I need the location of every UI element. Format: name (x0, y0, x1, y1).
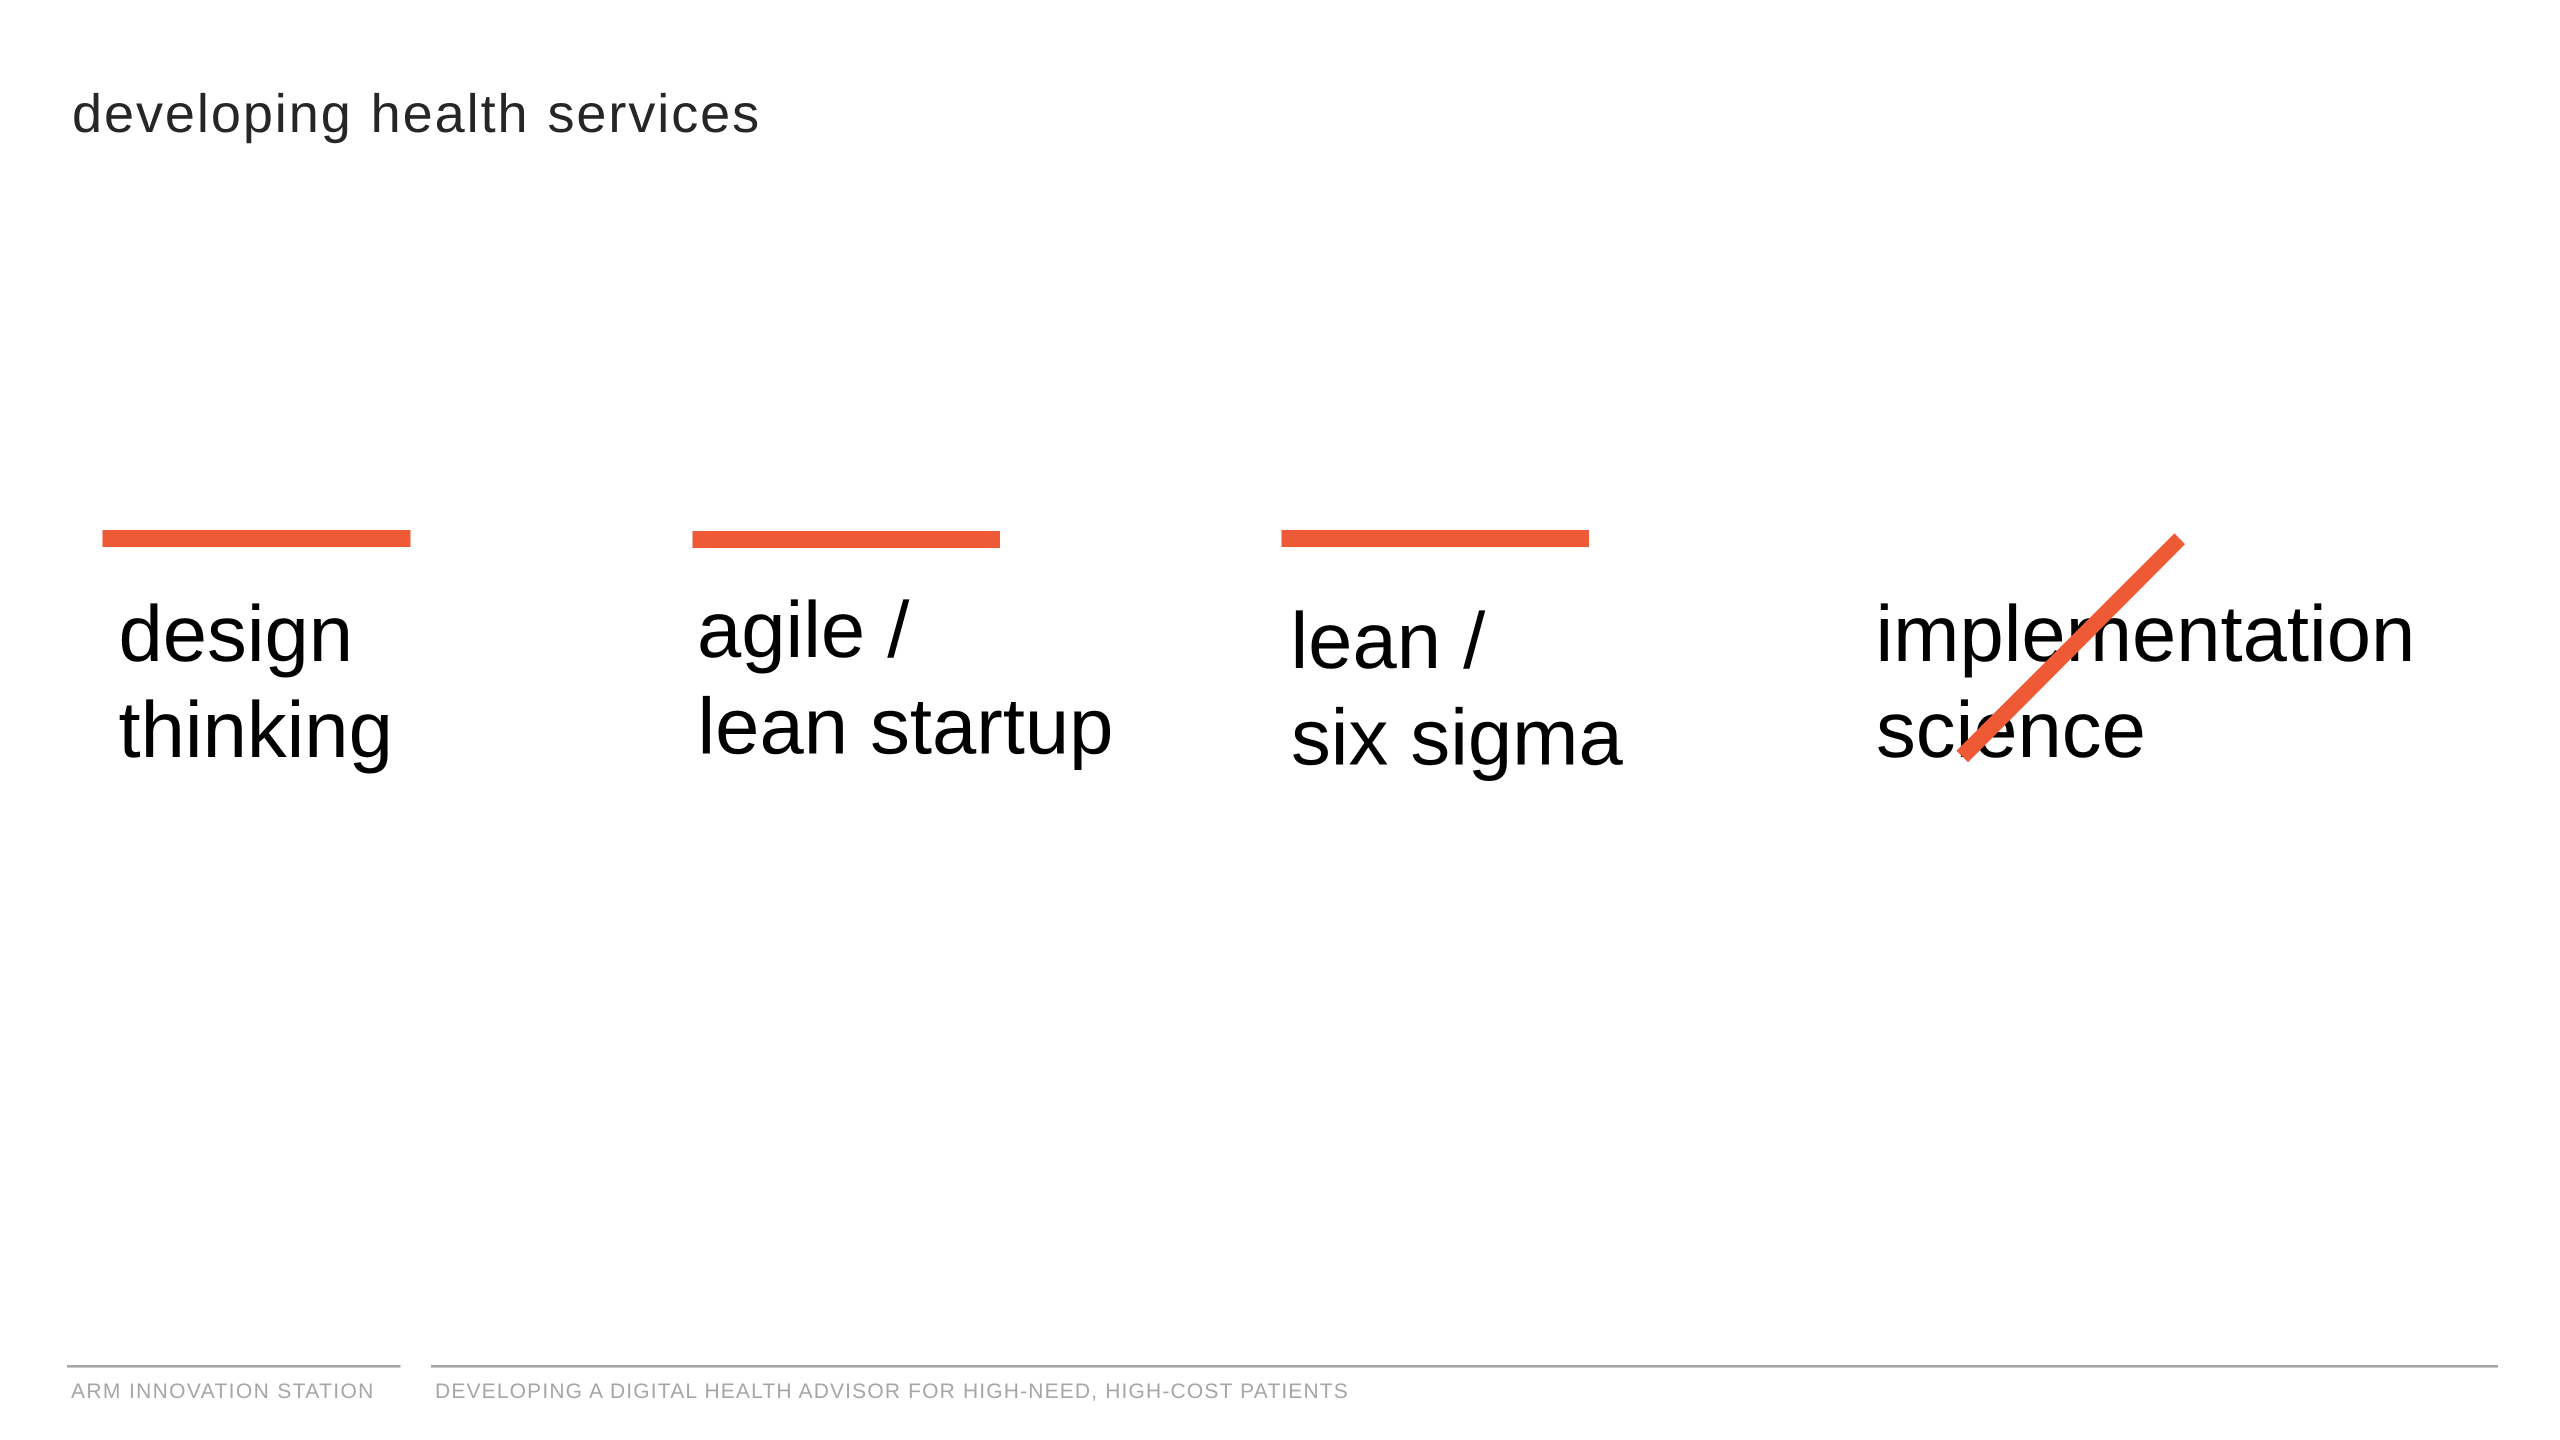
footer text: presentation title: DEVELOPING A DIGITAL HEALTH ADVISOR FOR HIGH-NEED, HIGH-COST PATIENTS (435, 1380, 1349, 1403)
accent bar: agile / lean startup (692, 531, 1000, 548)
title: developing health services (72, 84, 761, 144)
footer rule: left (67, 1365, 400, 1368)
label: design thinking: thinking (118, 685, 393, 774)
label: agile / lean startup: agile / (697, 585, 910, 674)
panel: design thinking (102, 530, 410, 774)
label: implementation science: science (1876, 685, 2146, 774)
footer text: organisation: ARM INNOVATION STATION (71, 1380, 375, 1403)
accent bar: design thinking (102, 530, 410, 547)
label: implementation science: implementation (1876, 589, 2415, 678)
label: agile / lean startup: lean startup (698, 682, 1113, 770)
label: lean / six sigma: lean / (1290, 596, 1486, 685)
label: design thinking: design (118, 589, 353, 678)
panel: agile / lean startup (692, 531, 1113, 770)
panel: implementation science (struck out) (1876, 533, 2415, 774)
panel: lean / six sigma (1282, 530, 1623, 782)
strike-through slash (1956, 533, 2185, 762)
label: lean / six sigma: six sigma (1291, 692, 1623, 782)
footer rule: right (431, 1365, 2498, 1368)
accent bar: lean / six sigma (1282, 530, 1589, 547)
